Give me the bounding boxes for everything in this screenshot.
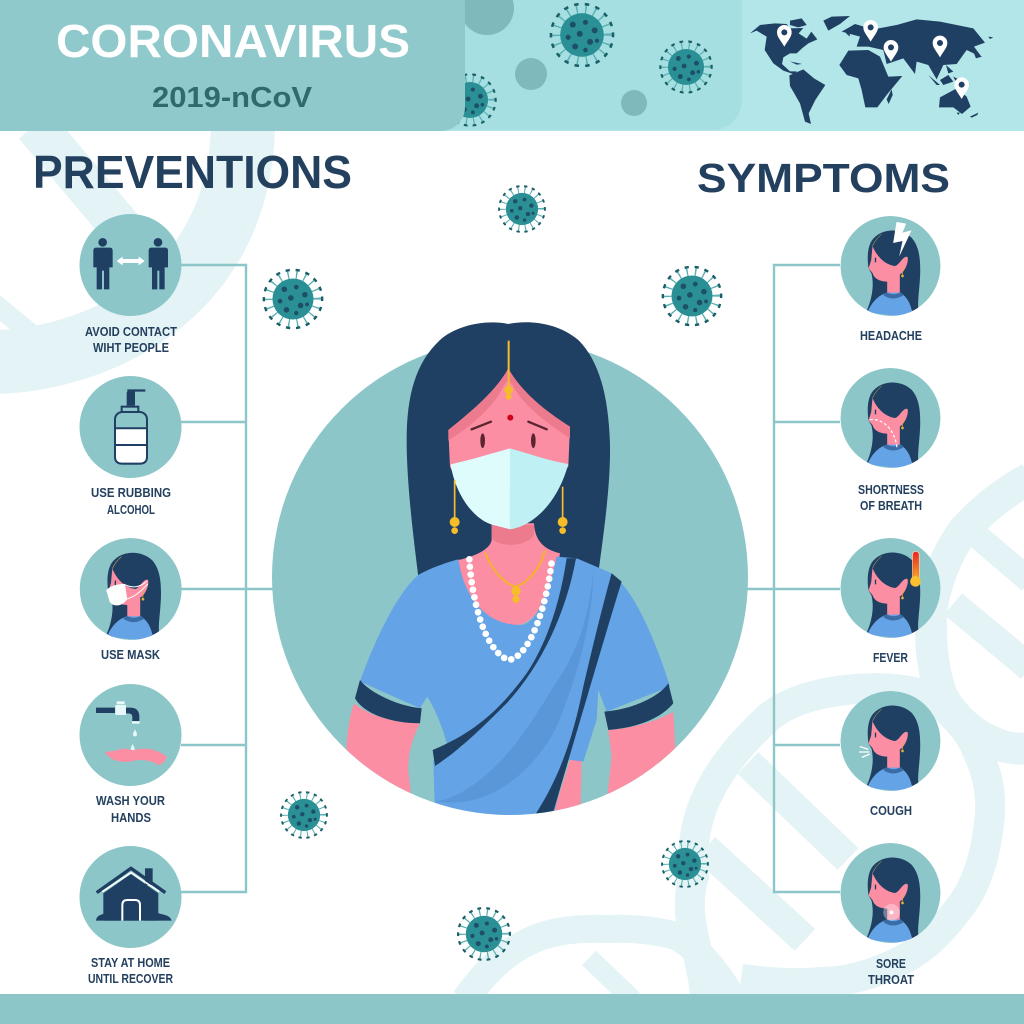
label: wash hands: WASH YOUR (96, 794, 165, 808)
subtitle: 2019-nCoV (152, 82, 313, 114)
label: avoid contact (85, 325, 177, 355)
symptom 3: fever (841, 538, 940, 640)
label: use rubbing alcohol: USE RUBBING (91, 486, 171, 500)
label: use mask: USE MASK (101, 648, 160, 662)
label: avoid contact: WIHT PEOPLE (93, 341, 169, 355)
prevention 4: wash hands (80, 684, 182, 786)
symptom 2: shortness of breath (841, 368, 940, 470)
virus: behind title (444, 74, 496, 126)
hair (407, 322, 610, 577)
mask (451, 448, 510, 529)
central circle (272, 339, 748, 815)
gold necklace (485, 551, 545, 587)
prevention 1: avoid contact (80, 214, 182, 316)
heading: preventions: PREVENTIONS (33, 146, 352, 198)
world map (750, 16, 993, 124)
prevention 5: stay at home (80, 846, 182, 948)
label: wash hands: HANDS (111, 811, 151, 825)
label: stay at home: STAY AT HOME (91, 956, 170, 970)
pearl necklace (469, 557, 552, 660)
maang tikka (506, 341, 512, 388)
prevention 2: rubbing alcohol (80, 376, 182, 478)
label: headache: HEADACHE (860, 329, 922, 343)
label: wash hands (96, 794, 165, 825)
label: stay at home: UNTIL RECOVER (88, 972, 173, 986)
label: sore throat: THROAT (868, 973, 914, 987)
virus: header small (660, 41, 712, 93)
central woman with mask (346, 322, 677, 817)
floating viruses (264, 186, 721, 960)
symptom 1: headache (841, 216, 940, 318)
label: use rubbing alcohol: ALCOHOL (107, 503, 155, 517)
face (448, 368, 570, 489)
label: shortness of breath: SHORTNESS (858, 483, 924, 497)
label: use rubbing alcohol (91, 486, 171, 517)
label: shortness of breath: OF BREATH (860, 499, 922, 513)
header band (0, 0, 1024, 131)
label: avoid contact: AVOID CONTACT (85, 325, 177, 339)
label: sore throat (868, 957, 914, 987)
earrings (455, 480, 563, 520)
label: shortness of breath (858, 483, 924, 513)
symptom 5: sore throat (841, 843, 940, 945)
body (346, 523, 677, 817)
title: CORONAVIRUS (56, 15, 410, 67)
connector lines (181, 265, 840, 892)
title panel (0, 0, 465, 131)
heading: symptoms: SYMPTOMS (697, 155, 950, 201)
symptom 4: cough (841, 691, 940, 793)
label: sore throat: SORE (876, 957, 906, 971)
label: fever: FEVER (873, 651, 908, 665)
prevention 3: use mask (80, 538, 182, 642)
label: cough: COUGH (870, 804, 912, 818)
footer band (0, 994, 1024, 1024)
label: stay at home (88, 956, 173, 986)
virus: header (551, 4, 613, 66)
